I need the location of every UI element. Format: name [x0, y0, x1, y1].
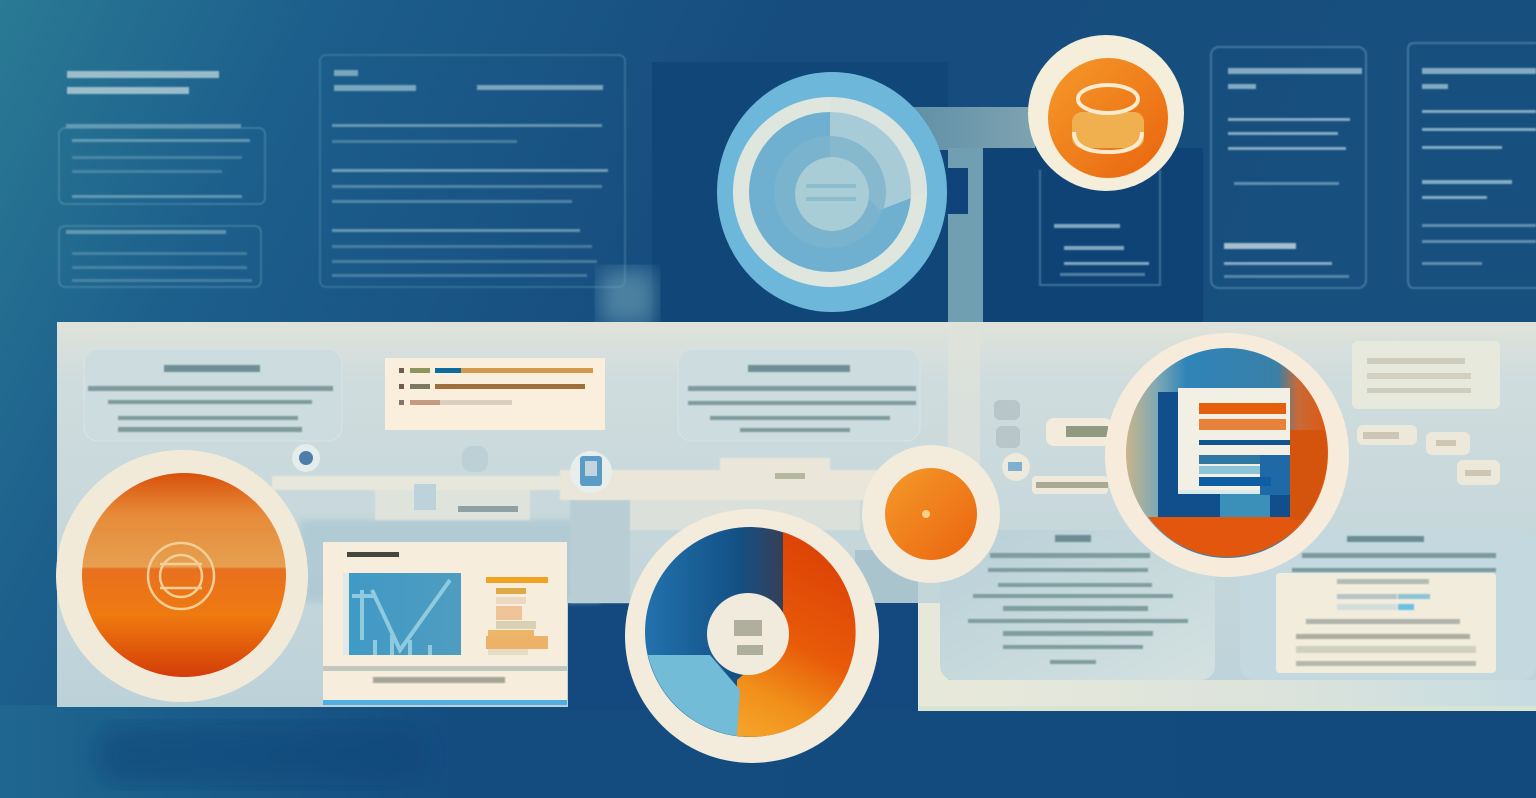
- flow connector: pale cloud path: [272, 458, 890, 603]
- panel: lower light band: [57, 322, 1536, 707]
- panel: right callouts: [1352, 341, 1500, 485]
- panel: chart card: [323, 542, 567, 705]
- panel: top middle-left text card: [320, 55, 625, 287]
- text block: top right lines: [1054, 68, 1536, 278]
- panel: top left text cards: [59, 128, 265, 287]
- icon: mid orange circle: [862, 445, 1000, 583]
- panel: top right text cards: [1040, 43, 1536, 288]
- panel: lower right text box A: [940, 530, 1215, 680]
- chart: pie donut: [625, 509, 879, 763]
- chart: stacked bars: [486, 577, 548, 655]
- icon: top orange circle: [1028, 35, 1184, 191]
- panel: legend bars card: [385, 358, 605, 430]
- icon: big orange circle: [56, 450, 308, 702]
- text block: [88, 365, 333, 432]
- bottom band: [0, 705, 1536, 798]
- text block: [688, 365, 916, 432]
- panel: lower middle text box: [678, 349, 920, 441]
- text block: [968, 535, 1188, 664]
- text block: top left card lines: [66, 124, 252, 282]
- text block: top middle-left lines: [332, 70, 608, 277]
- dark centre column: [652, 62, 948, 322]
- icon: small nodes: [292, 400, 1112, 512]
- heading: top left: [67, 71, 219, 94]
- icon: concentric blue target: [717, 72, 947, 312]
- panel: lower right text box B: [1240, 530, 1536, 680]
- panel: lower left text box: [84, 349, 342, 441]
- chart: blue line chart: [343, 573, 461, 655]
- connector band: [900, 107, 1035, 152]
- document: [1158, 388, 1290, 517]
- icon: circle with document list: [1105, 333, 1349, 577]
- text block: [1292, 536, 1496, 666]
